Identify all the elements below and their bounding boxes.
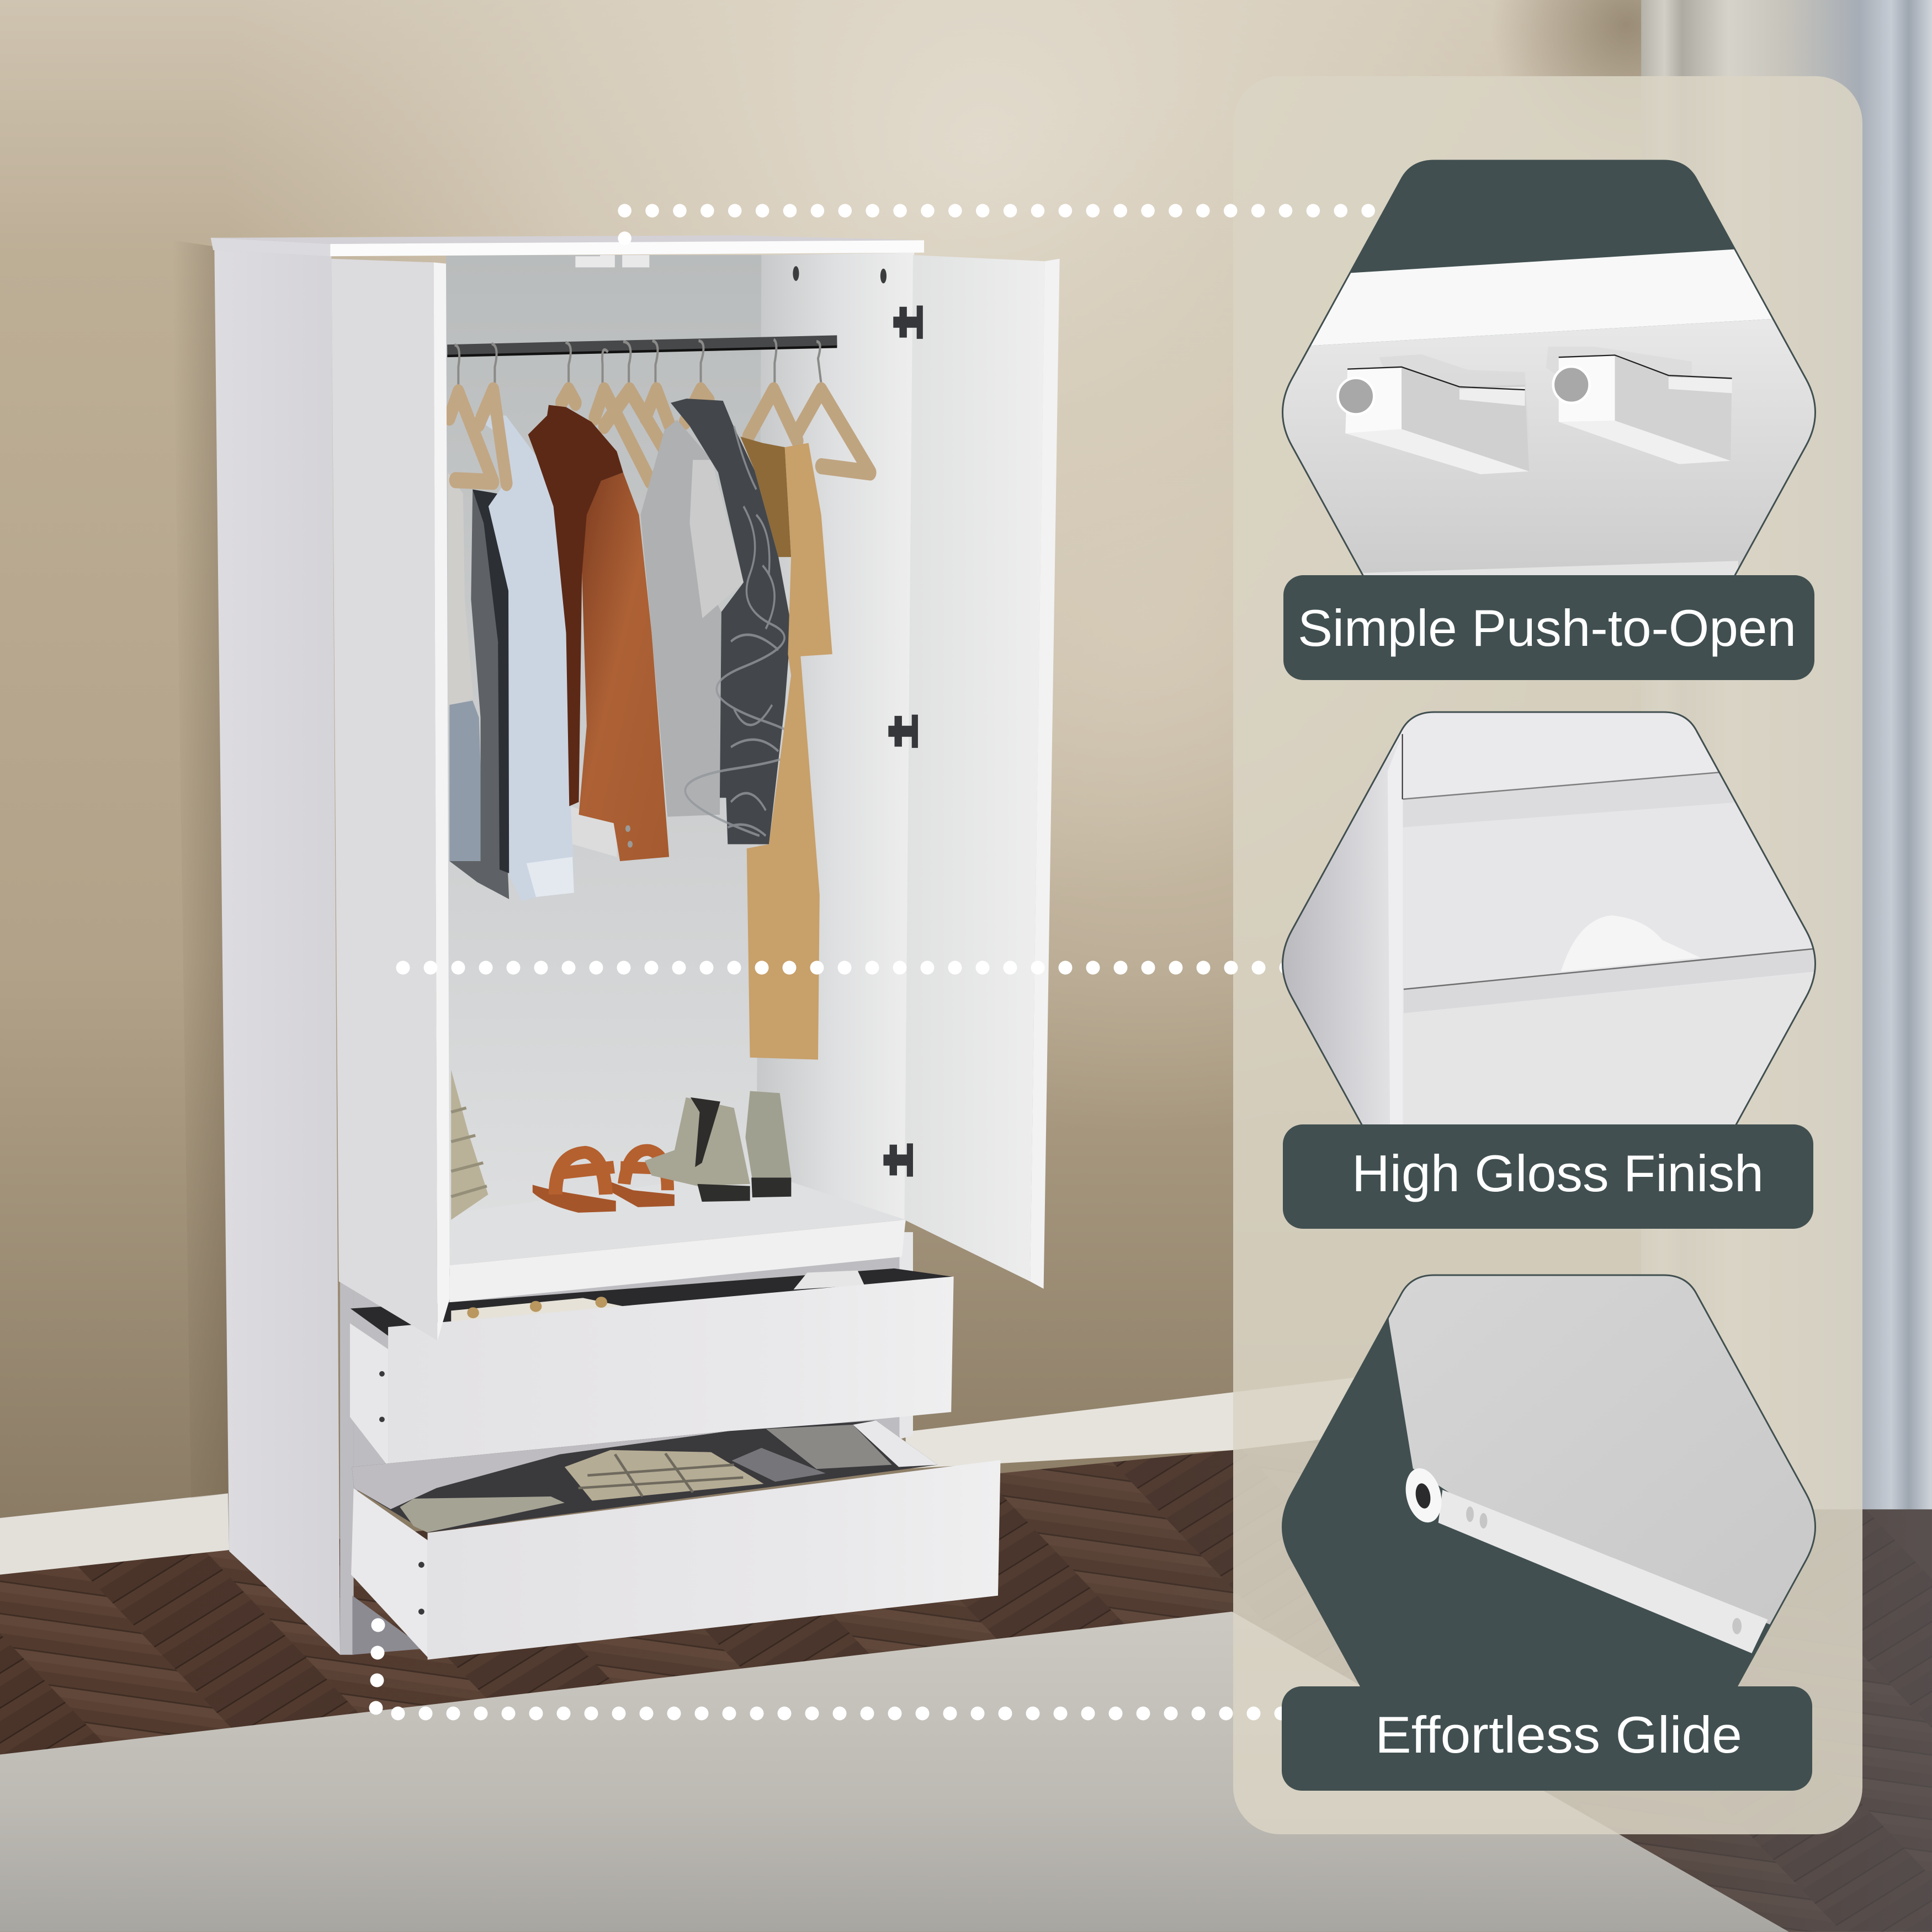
latch left (1337, 354, 1529, 474)
label bar (1282, 1686, 1812, 1791)
white top band (1311, 250, 1772, 346)
shadow strip one (1403, 767, 1827, 827)
blue grey shirt (449, 700, 484, 863)
wall shadow behind wardrobe (172, 240, 229, 1498)
lower drawer interior and contents (352, 1420, 938, 1532)
vertical pillar (1388, 711, 1403, 1148)
interior shelf front (450, 1220, 906, 1302)
curtain (1641, 0, 1932, 1509)
bottom strip (1362, 561, 1738, 575)
door side facet (1265, 734, 1403, 1148)
screws (418, 1562, 424, 1615)
woven bag (451, 1070, 488, 1220)
dotted connector: glide (369, 1618, 1286, 1715)
boot left (645, 1097, 750, 1202)
dress (747, 443, 832, 1060)
hexagon outline (1283, 161, 1815, 664)
dotted connector: high gloss (403, 960, 1292, 975)
dark garment (473, 490, 511, 874)
label bar (1283, 1124, 1813, 1229)
label bar (1283, 575, 1814, 680)
top plate (211, 235, 924, 256)
top drawer face (1403, 690, 1827, 799)
dotted connector: push-to-open (618, 211, 1386, 245)
right door (904, 255, 1060, 1289)
rug (0, 1612, 1789, 1932)
sandal right (608, 1150, 675, 1207)
hexagon image: drawer runner (1270, 1242, 1827, 1783)
cabinet holes (793, 266, 887, 283)
upper drawer (350, 1268, 954, 1466)
roller wheel (1400, 1464, 1447, 1526)
hinge bottom (883, 1143, 913, 1177)
leather jacket body (528, 405, 623, 806)
front hangers (449, 390, 507, 483)
drawer side (350, 1323, 388, 1466)
floral lines (685, 426, 803, 836)
hinge middle (888, 715, 918, 748)
bag and shoes (451, 1070, 791, 1220)
floral shirt (671, 399, 791, 844)
front pillar (340, 1269, 354, 1655)
leather sleeve (579, 473, 669, 861)
sandal left (533, 1152, 616, 1213)
shirt tail (571, 806, 617, 857)
far left shirt (448, 473, 473, 707)
reflection (1561, 915, 1700, 972)
body gap behind drawers (354, 1251, 912, 1491)
wardrobe (172, 235, 1060, 1660)
left door (331, 259, 450, 1341)
panel: features background (1233, 76, 1862, 1834)
light blue shirt (473, 416, 574, 901)
feature: effortless glide (1270, 1242, 1827, 1791)
under-drawer gap (352, 1596, 425, 1655)
dot at wardrobe top (618, 231, 631, 245)
drawer side (351, 1488, 428, 1657)
hinges (883, 306, 923, 1177)
horizontal dots top (625, 208, 1386, 214)
label text: Simple Push-to-Open (1298, 599, 1796, 657)
latch right (1546, 347, 1732, 464)
rail (447, 341, 837, 350)
underside plate (1383, 1242, 1827, 1630)
floor (0, 1392, 1932, 1932)
push latches on ceiling (575, 255, 649, 267)
hexagon image: latches (1283, 161, 1814, 575)
vertical dots (369, 1618, 385, 1715)
grey sleeve (689, 460, 744, 618)
shadow strip two (1404, 949, 1814, 1013)
lower face (1404, 972, 1827, 1148)
strip line one (1403, 772, 1719, 799)
hanging rail and clothes (447, 339, 871, 1060)
drawer front (428, 1460, 1000, 1660)
grey garment (449, 490, 509, 899)
hooks (454, 339, 821, 388)
label text: Effortless Glide (1375, 1706, 1742, 1764)
baseboard left (0, 1493, 229, 1575)
feature: high gloss finish (1265, 690, 1827, 1229)
horizontal dots bottom (398, 1707, 1286, 1720)
jacket snaps (625, 825, 633, 848)
right pillar (899, 1232, 913, 1439)
screws (379, 1371, 385, 1422)
underside surface (1283, 319, 1814, 573)
hexagon outline (1283, 712, 1815, 1216)
shirt cuff (527, 857, 574, 897)
runner strip (1439, 1490, 1768, 1653)
door edge line (1402, 734, 1403, 799)
wall light band (0, 0, 1932, 1232)
upper drawer interior and contents (351, 1268, 954, 1336)
back hangers (561, 390, 871, 481)
drawer front (388, 1276, 954, 1466)
strip line two (1404, 949, 1814, 989)
feature: simple push-to-open (1282, 160, 1816, 680)
grey shirt (640, 420, 744, 817)
hexagon image: glossy fronts (1265, 690, 1827, 1220)
interior right wall (757, 253, 914, 1222)
runner holes (1466, 1506, 1742, 1634)
lower drawer (351, 1420, 1000, 1660)
hexagon outline (1283, 1275, 1815, 1779)
dress upper (740, 437, 791, 557)
boot right (745, 1091, 791, 1197)
baseboard right (906, 1368, 1651, 1469)
side panel (214, 250, 340, 1655)
interior back wall (446, 255, 764, 1269)
hinge top (893, 306, 923, 339)
label text: High Gloss Finish (1352, 1144, 1764, 1202)
interior shelf top (450, 1170, 906, 1265)
rail lower edge (447, 347, 837, 356)
